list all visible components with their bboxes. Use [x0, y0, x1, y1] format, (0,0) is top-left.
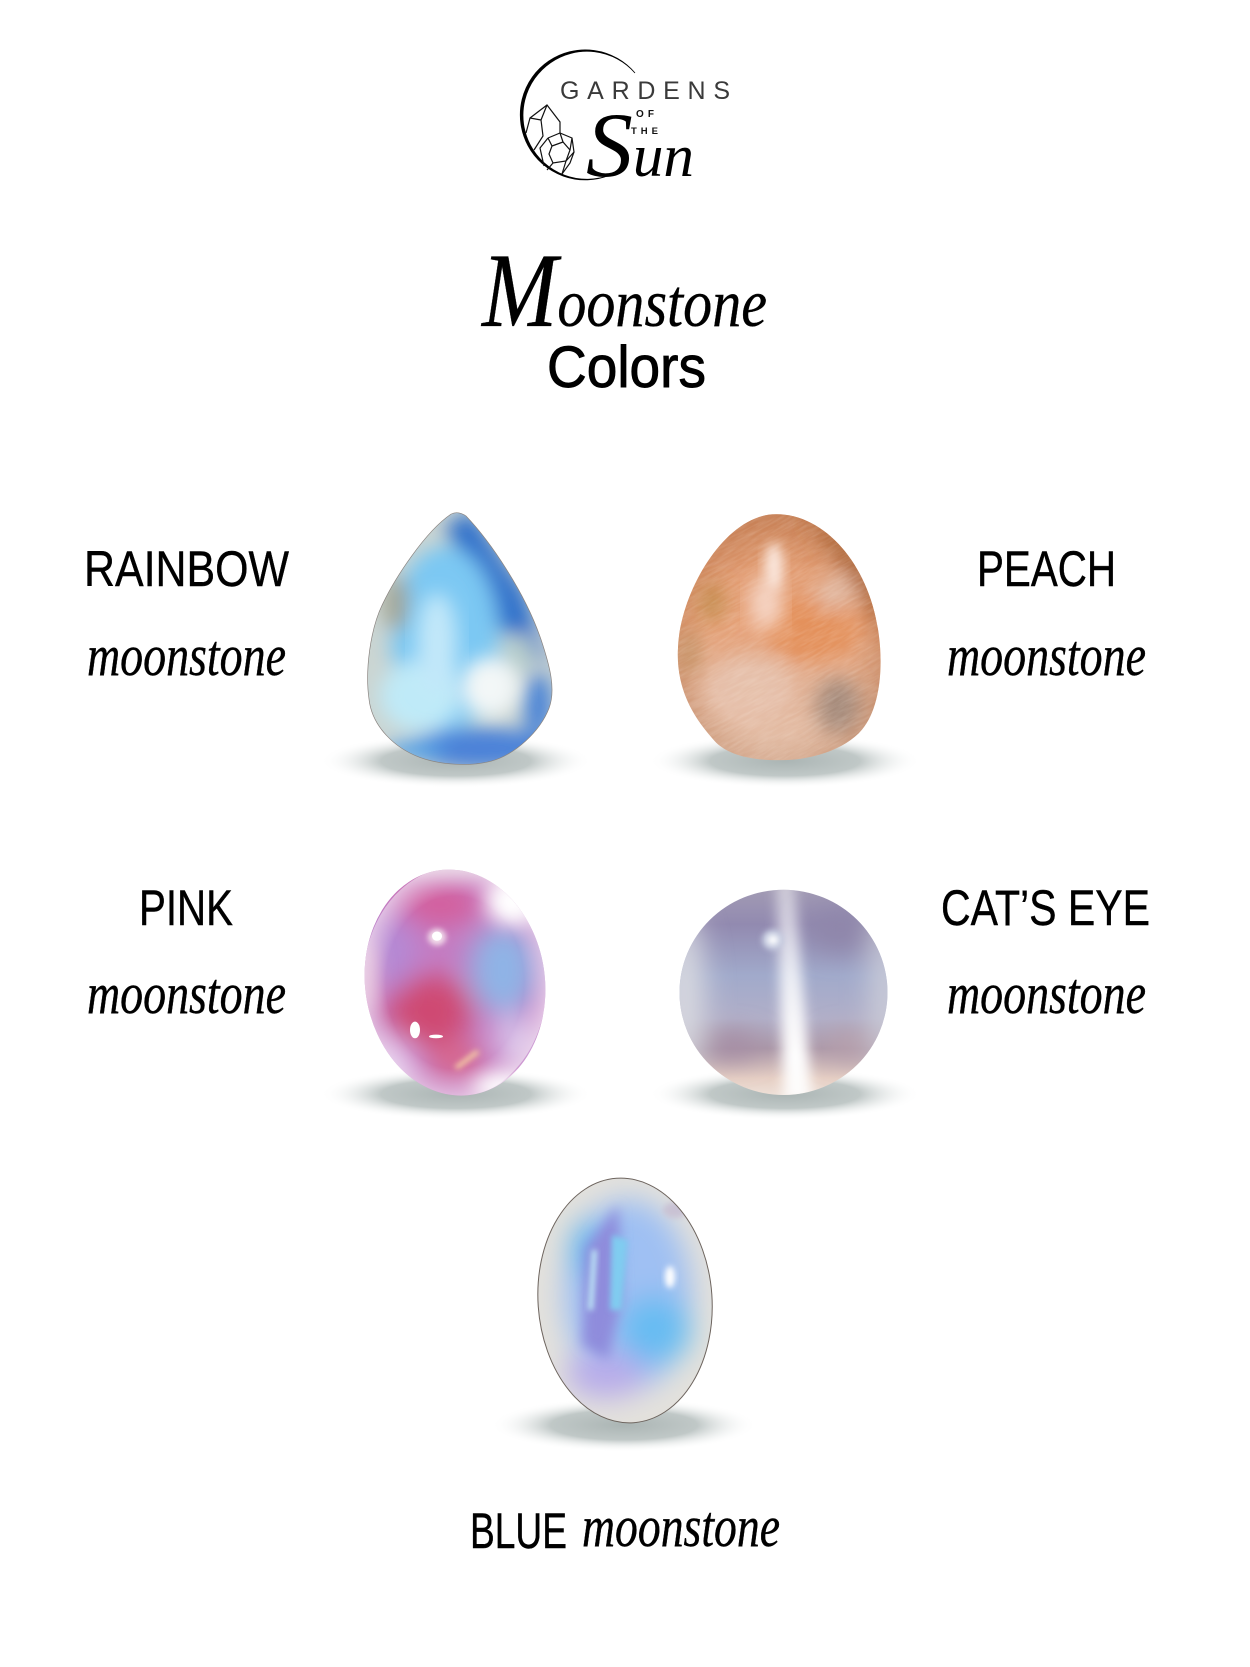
gem: blue oval [537, 1178, 713, 1424]
label: moonstone script: moonstone [582, 1494, 780, 1559]
label: BLUE: BLUE [470, 1503, 567, 1559]
panel: pink moonstone [87, 862, 592, 1120]
label: moonstone script: moonstone [87, 961, 286, 1026]
gem: pink oval [364, 870, 546, 1096]
logo word OF: OF [636, 109, 654, 120]
panel: blue moonstone [470, 1170, 780, 1559]
title: Moonstone Colors [480, 232, 767, 400]
logo wordmark GARDENS: GARDENS [560, 77, 730, 105]
panel: rainbow moonstone [84, 504, 592, 788]
title script Moonstone: Moonstone [480, 232, 767, 349]
title word Colors: Colors [547, 335, 706, 400]
label: PEACH: PEACH [977, 541, 1116, 597]
logo word THE: THE [631, 126, 658, 137]
label: moonstone script: moonstone [87, 623, 286, 688]
shadow [320, 1068, 592, 1120]
logo crystals icon [526, 105, 574, 174]
shadow [649, 734, 921, 788]
logo: Gardens of the Sun [520, 50, 730, 196]
label: moonstone script: moonstone [947, 623, 1146, 688]
panel: peach moonstone [87, 428, 1150, 1559]
panel: cat's eye moonstone [671, 890, 1148, 1116]
label: RAINBOW: RAINBOW [84, 541, 290, 597]
shadow [320, 734, 592, 788]
logo crescent ring [520, 50, 635, 180]
gem: cat's eye sphere [680, 890, 888, 1095]
label: moonstone script: moonstone [947, 961, 1146, 1026]
label: CAT'S EYE: CAT’S EYE [941, 880, 1150, 936]
label: PINK: PINK [139, 880, 233, 936]
gem: peach egg [678, 514, 881, 760]
shadow [649, 1068, 921, 1120]
gem: rainbow teardrop [367, 512, 552, 765]
shadow [491, 1398, 757, 1452]
logo script Sun: Sun [586, 94, 694, 196]
